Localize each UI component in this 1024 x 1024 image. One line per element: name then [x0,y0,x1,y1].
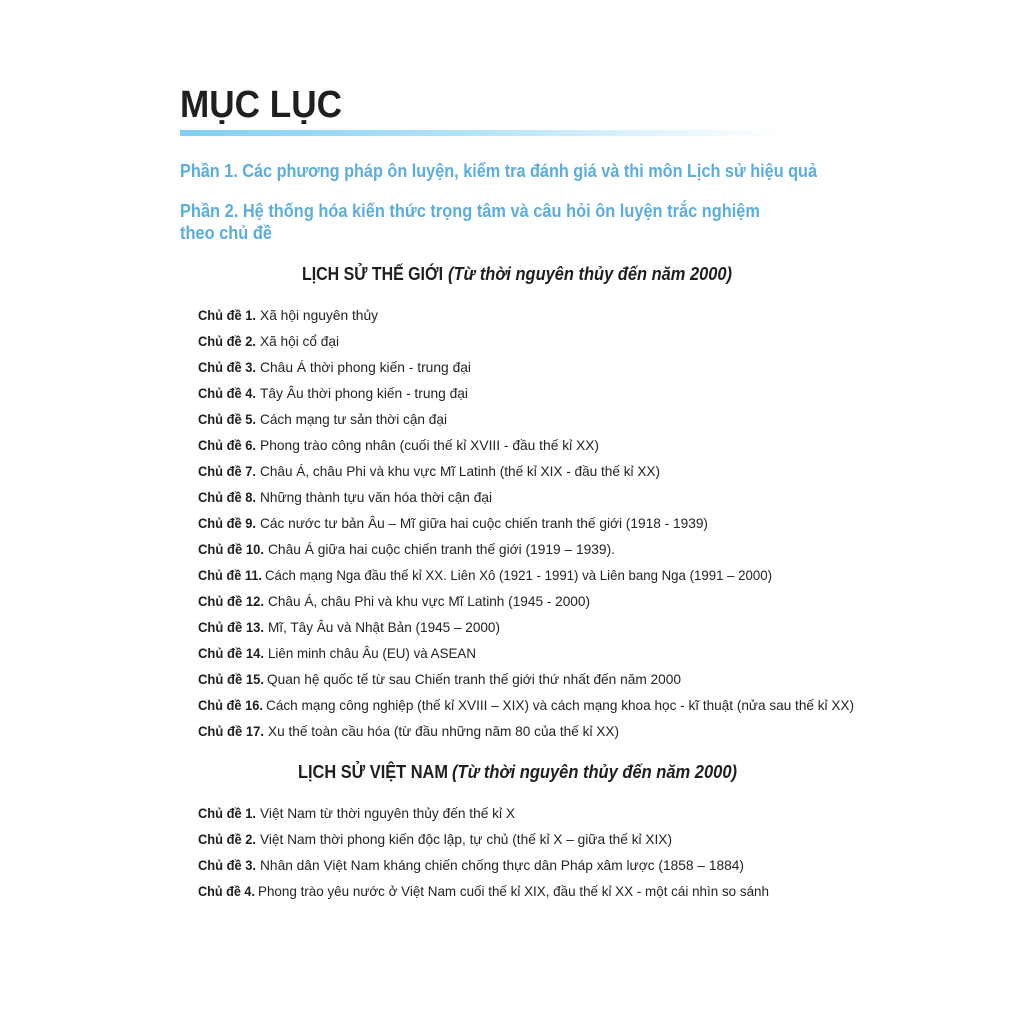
topic 14: Chủ đề 14. [198,645,264,661]
Vietnam topic 1: Chủ đề 1. [198,805,256,821]
topic 4: Tây Âu thời phong kiến - trung đại [260,385,468,401]
section heading: Vietnam history: (Từ thời nguyên thủy đến năm 2000) [452,762,737,782]
topic 11: Chủ đề 11. [198,567,262,583]
topic 4: Chủ đề 4. [198,385,256,401]
topic 3: Châu Á thời phong kiến - trung đại [260,359,471,375]
topic 9: Các nước tư bản Âu – Mĩ giữa hai cuộc chiến tranh thế giới (1918 - 1939) [260,515,708,531]
topic 1: Xã hội nguyên thủy [260,307,378,323]
topic 7: Châu Á, châu Phi và khu vực Mĩ Latinh (thế kỉ XIX - đầu thế kỉ XX) [260,463,660,479]
topic 1 [198,307,378,323]
topic 8: Những thành tựu văn hóa thời cận đại [260,489,492,505]
topic 10: Châu Á giữa hai cuộc chiến tranh thế giới (1919 – 1939). [268,541,615,557]
Vietnam topic 3: Chủ đề 3. [198,857,256,873]
topic 2: Chủ đề 2. [198,333,256,349]
topic 16: Chủ đề 16. [198,697,263,713]
topic 12: Châu Á, châu Phi và khu vực Mĩ Latinh (1945 - 2000) [268,593,590,609]
topic 13: Mĩ, Tây Âu và Nhật Bản (1945 – 2000) [268,619,500,635]
topic 13: Chủ đề 13. [198,619,264,635]
Vietnam topic 4: Phong trào yêu nước ở Việt Nam cuối thế kỉ XIX, đầu thế kỉ XX - một cái nhìn so sánh [258,883,769,899]
panel: Vietnam history topics [198,805,769,899]
title underline gradient bar [180,130,780,136]
topic 5: Cách mạng tư sản thời cận đại [260,411,447,427]
Vietnam topic 2: Chủ đề 2. [198,831,256,847]
topic 11: Cách mạng Nga đầu thế kỉ XX. Liên Xô (1921 - 1991) và Liên bang Nga (1991 – 2000) [265,567,772,583]
Vietnam topic 2: Việt Nam thời phong kiến độc lập, tự chủ (thế kỉ X – giữa thế kỉ XIX) [260,831,672,847]
section heading: world history: (Từ thời nguyên thủy đến năm 2000) [448,264,732,284]
topic 10: Chủ đề 10. [198,541,264,557]
part 2 heading: Phần 2. Hệ thống hóa kiến thức trọng tâm và câu hỏi ôn luyện trắc nghiệm [180,200,760,221]
topic 12: Chủ đề 12. [198,593,264,609]
topic 15: Chủ đề 15. [198,671,264,687]
topic 7: Chủ đề 7. [198,463,256,479]
topic 17: Xu thế toàn cầu hóa (từ đầu những năm 80 của thế kỉ XX) [268,723,619,739]
topic 15: Quan hệ quốc tế từ sau Chiến tranh thế giới thứ nhất đến năm 2000 [267,671,681,687]
part 2 heading: theo chủ đề [180,223,272,243]
topic 6: Phong trào công nhân (cuối thế kỉ XVIII - đầu thế kỉ XX) [260,437,599,453]
Vietnam topic 3: Nhân dân Việt Nam kháng chiến chống thực dân Pháp xâm lược (1858 – 1884) [260,857,744,873]
section heading: Vietnam history [298,761,737,782]
title: MỤC LỤC [180,84,342,126]
part 2 heading [180,200,760,243]
section heading: world history [302,263,732,284]
topic 6: Chủ đề 6. [198,437,256,453]
Vietnam topic 4: Chủ đề 4. [198,883,255,899]
topic 1: Chủ đề 1. [198,307,256,323]
topic 2 [198,333,339,349]
topic 17: Chủ đề 17. [198,723,264,739]
part 1 heading: Phần 1. Các phương pháp ôn luyện, kiểm tra đánh giá và thi môn Lịch sử hiệu quả [180,161,818,181]
topic 9: Chủ đề 9. [198,515,256,531]
section heading: world history: LỊCH SỬ THẾ GIỚI [302,263,443,284]
section heading: Vietnam history: LỊCH SỬ VIỆT NAM [298,761,448,782]
topic 16: Cách mạng công nghiệp (thế kỉ XVIII – XIX) và cách mạng khoa học - kĩ thuật (nửa sau thế kỉ XX) [266,697,854,713]
topic 8: Chủ đề 8. [198,489,256,505]
topic 5: Chủ đề 5. [198,411,256,427]
topic 2: Xã hội cổ đại [260,333,339,349]
topic 14: Liên minh châu Âu (EU) và ASEAN [268,645,476,661]
topic 3: Chủ đề 3. [198,359,256,375]
panel: world history topics [198,307,854,739]
Vietnam topic 1: Việt Nam từ thời nguyên thủy đến thế kỉ X [260,805,516,821]
